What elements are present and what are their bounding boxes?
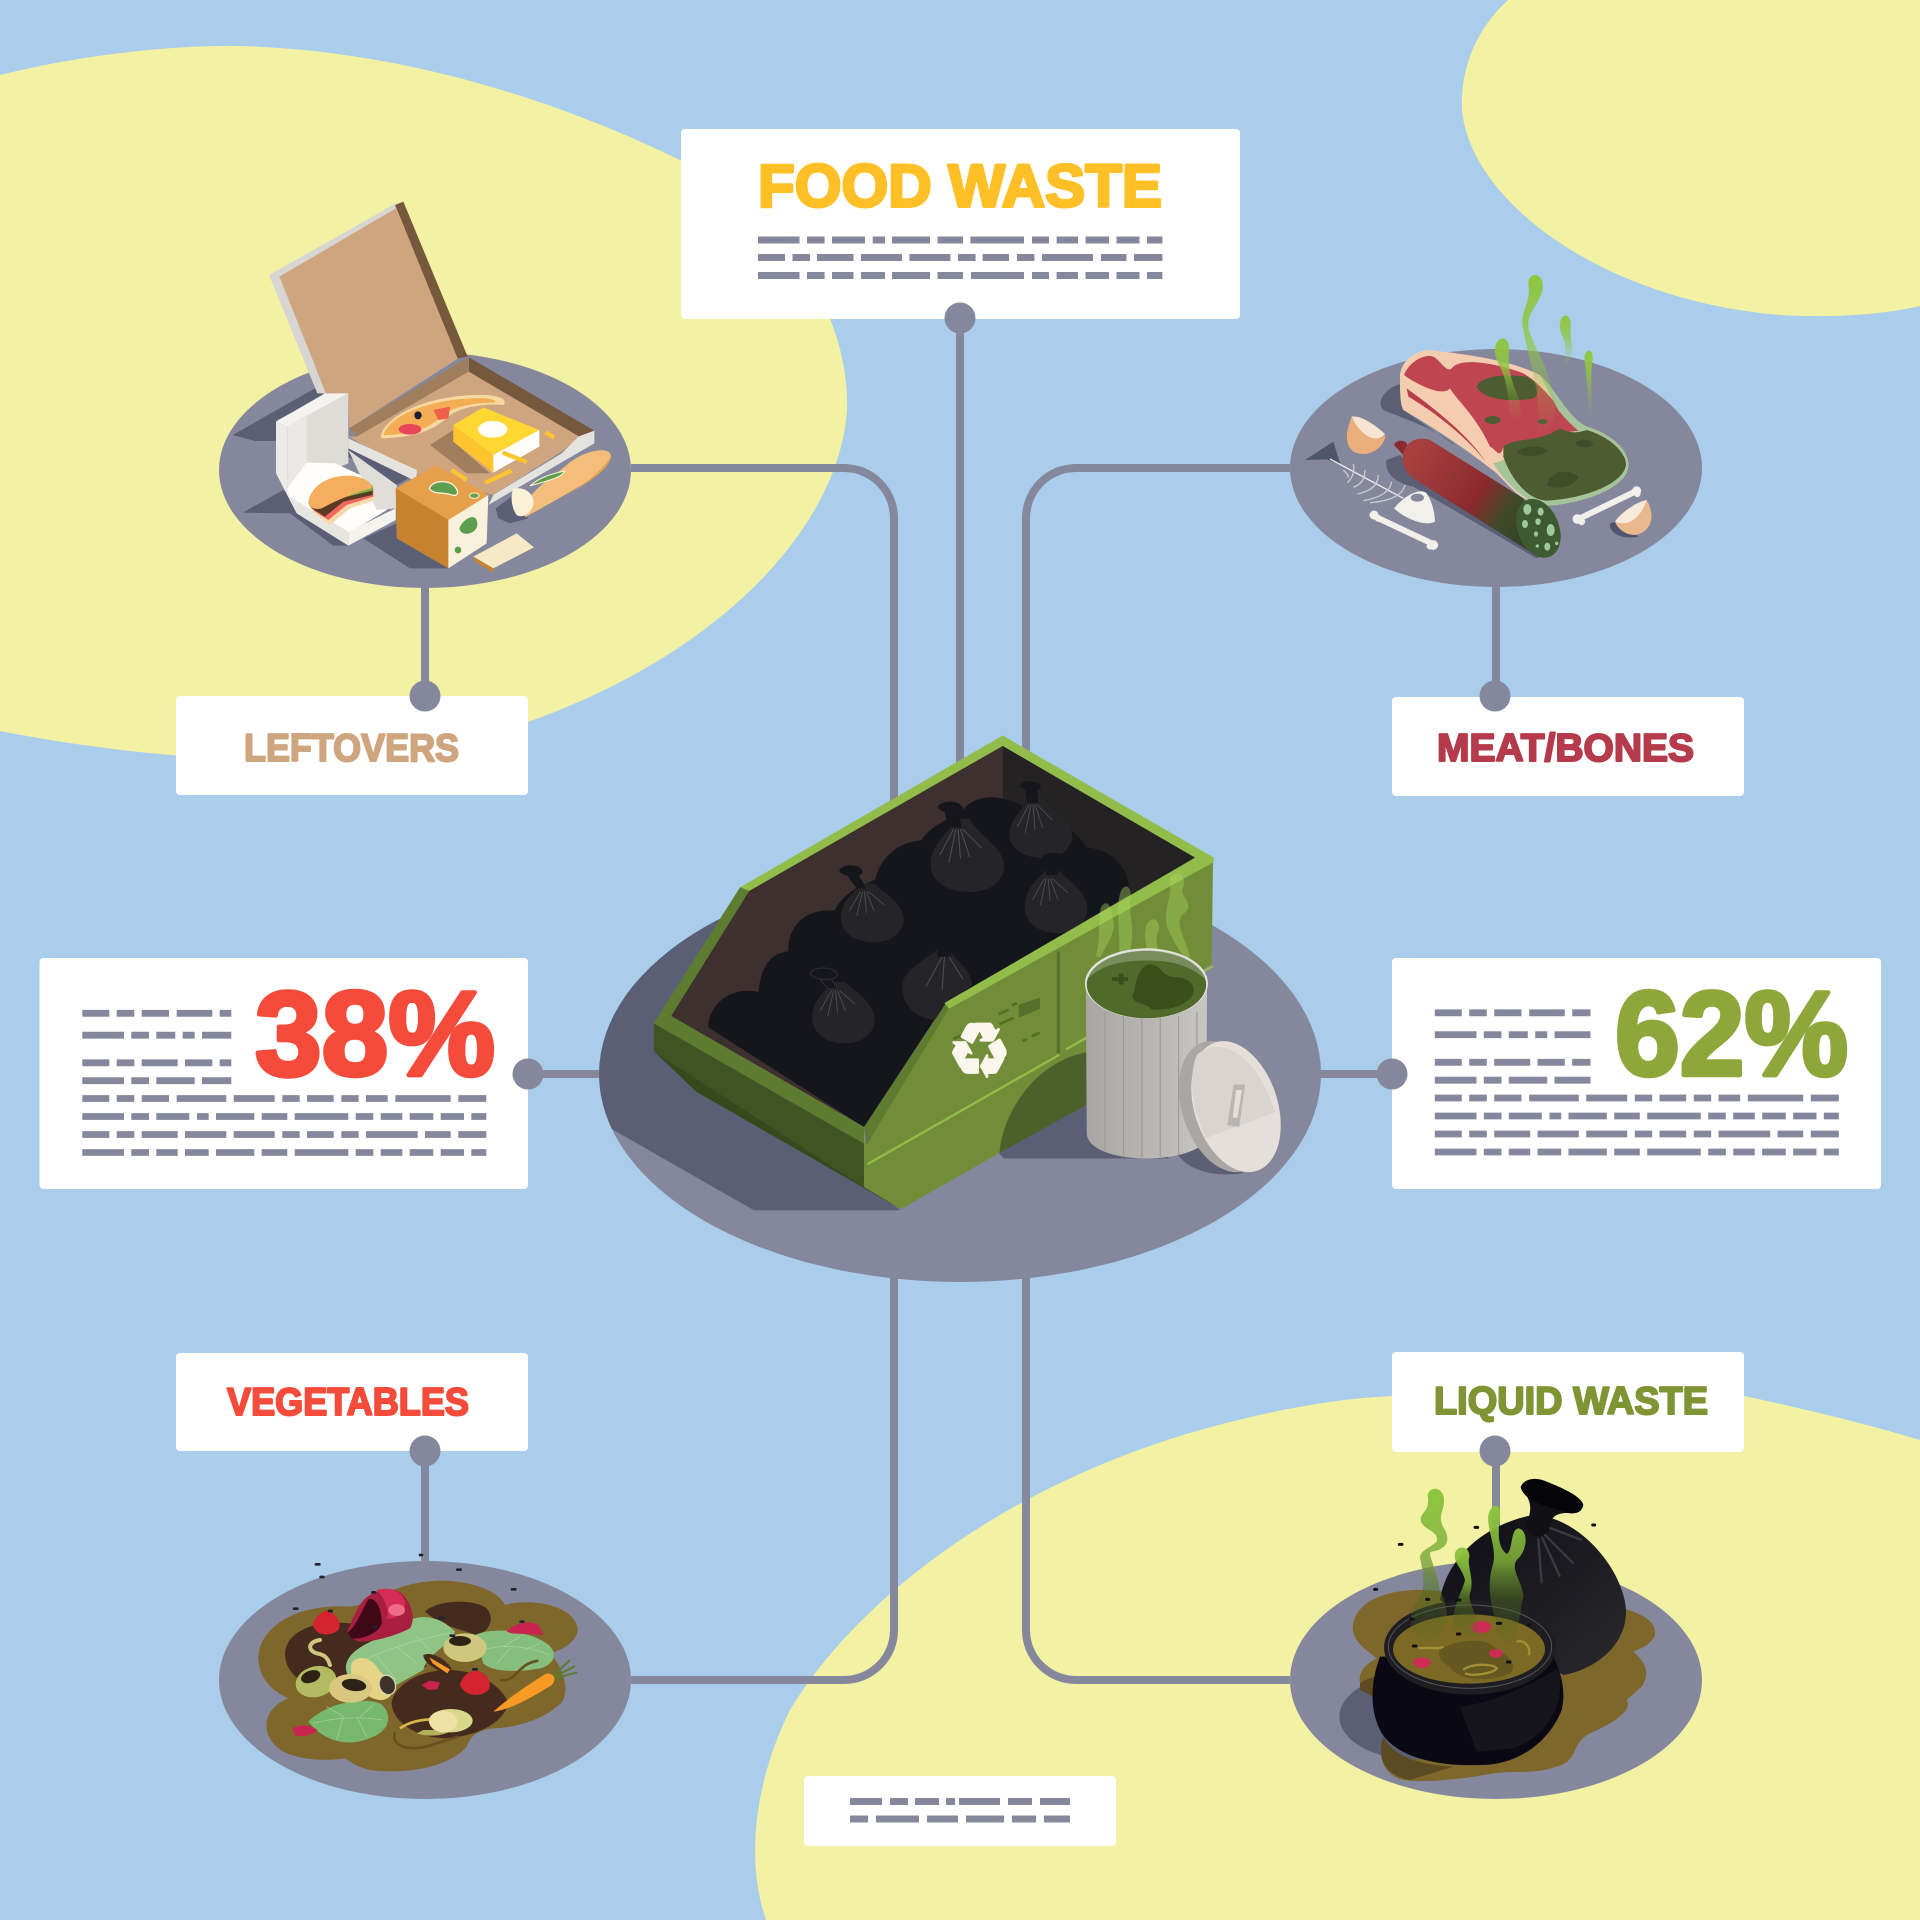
illustration: meat and bones (1290, 275, 1702, 587)
panel: leftovers label (176, 680, 528, 795)
bread slice crust (473, 557, 493, 573)
yellow blob: top right (1462, 0, 1920, 316)
stain over shadow (1360, 1677, 1453, 1780)
panel: 38% stat (40, 958, 544, 1189)
stench steam (1495, 275, 1593, 435)
flies (1375, 1525, 1595, 1662)
rotten apple (347, 1589, 413, 1642)
bones (1370, 486, 1641, 550)
pizza box base (348, 357, 594, 505)
panel: 62% stat (1376, 958, 1881, 1189)
label: meat/bones: MEAT/BONES (1437, 727, 1694, 770)
dumpster stench (1096, 874, 1190, 960)
bag 6 (810, 968, 875, 1043)
platform (1290, 349, 1702, 587)
french fries (452, 432, 554, 483)
heading: food waste: FOOD WASTE (758, 152, 1162, 220)
platform (599, 866, 1321, 1282)
illustration: leftovers (219, 202, 631, 588)
platform (219, 352, 631, 588)
pizza slice (381, 395, 505, 438)
bag 2 (1010, 781, 1072, 858)
panel: liquid waste label (1392, 1352, 1744, 1466)
pizza box lid (269, 202, 468, 428)
connector dot (944, 302, 976, 334)
trash can (1085, 948, 1208, 1158)
dumpster rim (740, 736, 1214, 891)
dark soil (285, 1602, 508, 1738)
platform (219, 1561, 631, 1799)
illustration: vegetables (219, 1555, 631, 1799)
pot shadow (1339, 1674, 1487, 1759)
platform shadows (233, 387, 528, 568)
illustration: central dumpster (595, 736, 1321, 1282)
dumpster shadow (595, 905, 1243, 1210)
yellow carton (430, 407, 539, 473)
bag 3 (1025, 853, 1087, 933)
bag 5 (902, 949, 972, 1020)
connector dot (410, 1436, 440, 1466)
placeholder text lines (758, 240, 1162, 276)
platform shadows (1381, 383, 1547, 558)
illustration: liquid waste (1290, 1479, 1702, 1799)
baguette (512, 450, 611, 517)
icon: recycling: ♻ (947, 1007, 1012, 1096)
connector dot (1376, 1058, 1408, 1090)
connector dot (512, 1058, 544, 1090)
egg shell right (1610, 500, 1651, 538)
garbage bags inside (810, 781, 1087, 1043)
panel: meat/bones label (1392, 680, 1744, 796)
connector lines (425, 318, 1496, 1680)
burger box (276, 393, 397, 546)
placeholder text lines (1435, 1013, 1839, 1152)
garbage bag (1440, 1479, 1626, 1675)
rotting sausage (1394, 439, 1569, 565)
moldy bread loaf (396, 465, 488, 568)
dumpster interior (671, 746, 1195, 1127)
placeholder text lines (82, 1013, 486, 1152)
yellow blob: bottom right (755, 1396, 1920, 1920)
soup bubbles (1413, 1621, 1503, 1668)
bag 1 (931, 802, 1004, 892)
bag 5 wrinkles (926, 957, 963, 990)
bag 4 (839, 865, 904, 942)
spilled liquid (1353, 1590, 1655, 1781)
carrot (423, 1654, 577, 1712)
brown sludge (258, 1581, 578, 1771)
label: liquid waste: LIQUID WASTE (1434, 1380, 1708, 1423)
egg shell left (1347, 416, 1386, 454)
platform (1290, 1561, 1702, 1799)
flies (294, 1555, 523, 1669)
connector dot (1480, 680, 1510, 712)
rotten potatoes (292, 1633, 487, 1703)
sprout and peel (310, 1640, 538, 1748)
fish skeleton (1305, 442, 1435, 523)
rotting meat steak (1400, 350, 1628, 506)
panel: food waste title (681, 129, 1240, 334)
dumpster front wall (864, 858, 1214, 1209)
panel: vegetables label (176, 1353, 528, 1466)
stench steam (1411, 1489, 1526, 1643)
yellow blob: top left (0, 46, 847, 765)
dumpster left wall (654, 887, 901, 1209)
trash can lid (1165, 1034, 1295, 1179)
panel: bottom caption (804, 1776, 1116, 1846)
label: leftovers: LEFTOVERS (244, 727, 459, 770)
bread slice (473, 533, 534, 568)
placeholder text lines (850, 1802, 1070, 1819)
stat: 38%: 38% (255, 967, 495, 1101)
small red fruits (293, 1611, 543, 1736)
burger (308, 476, 375, 525)
label: vegetables: VEGETABLES (227, 1381, 469, 1424)
stat: 62%: 62% (1615, 967, 1848, 1101)
connector dot (1480, 1436, 1510, 1466)
connector dot (410, 680, 440, 712)
bag 5 neck (933, 929, 960, 957)
black pot (1372, 1600, 1563, 1765)
cabbage leaves (308, 1617, 554, 1742)
